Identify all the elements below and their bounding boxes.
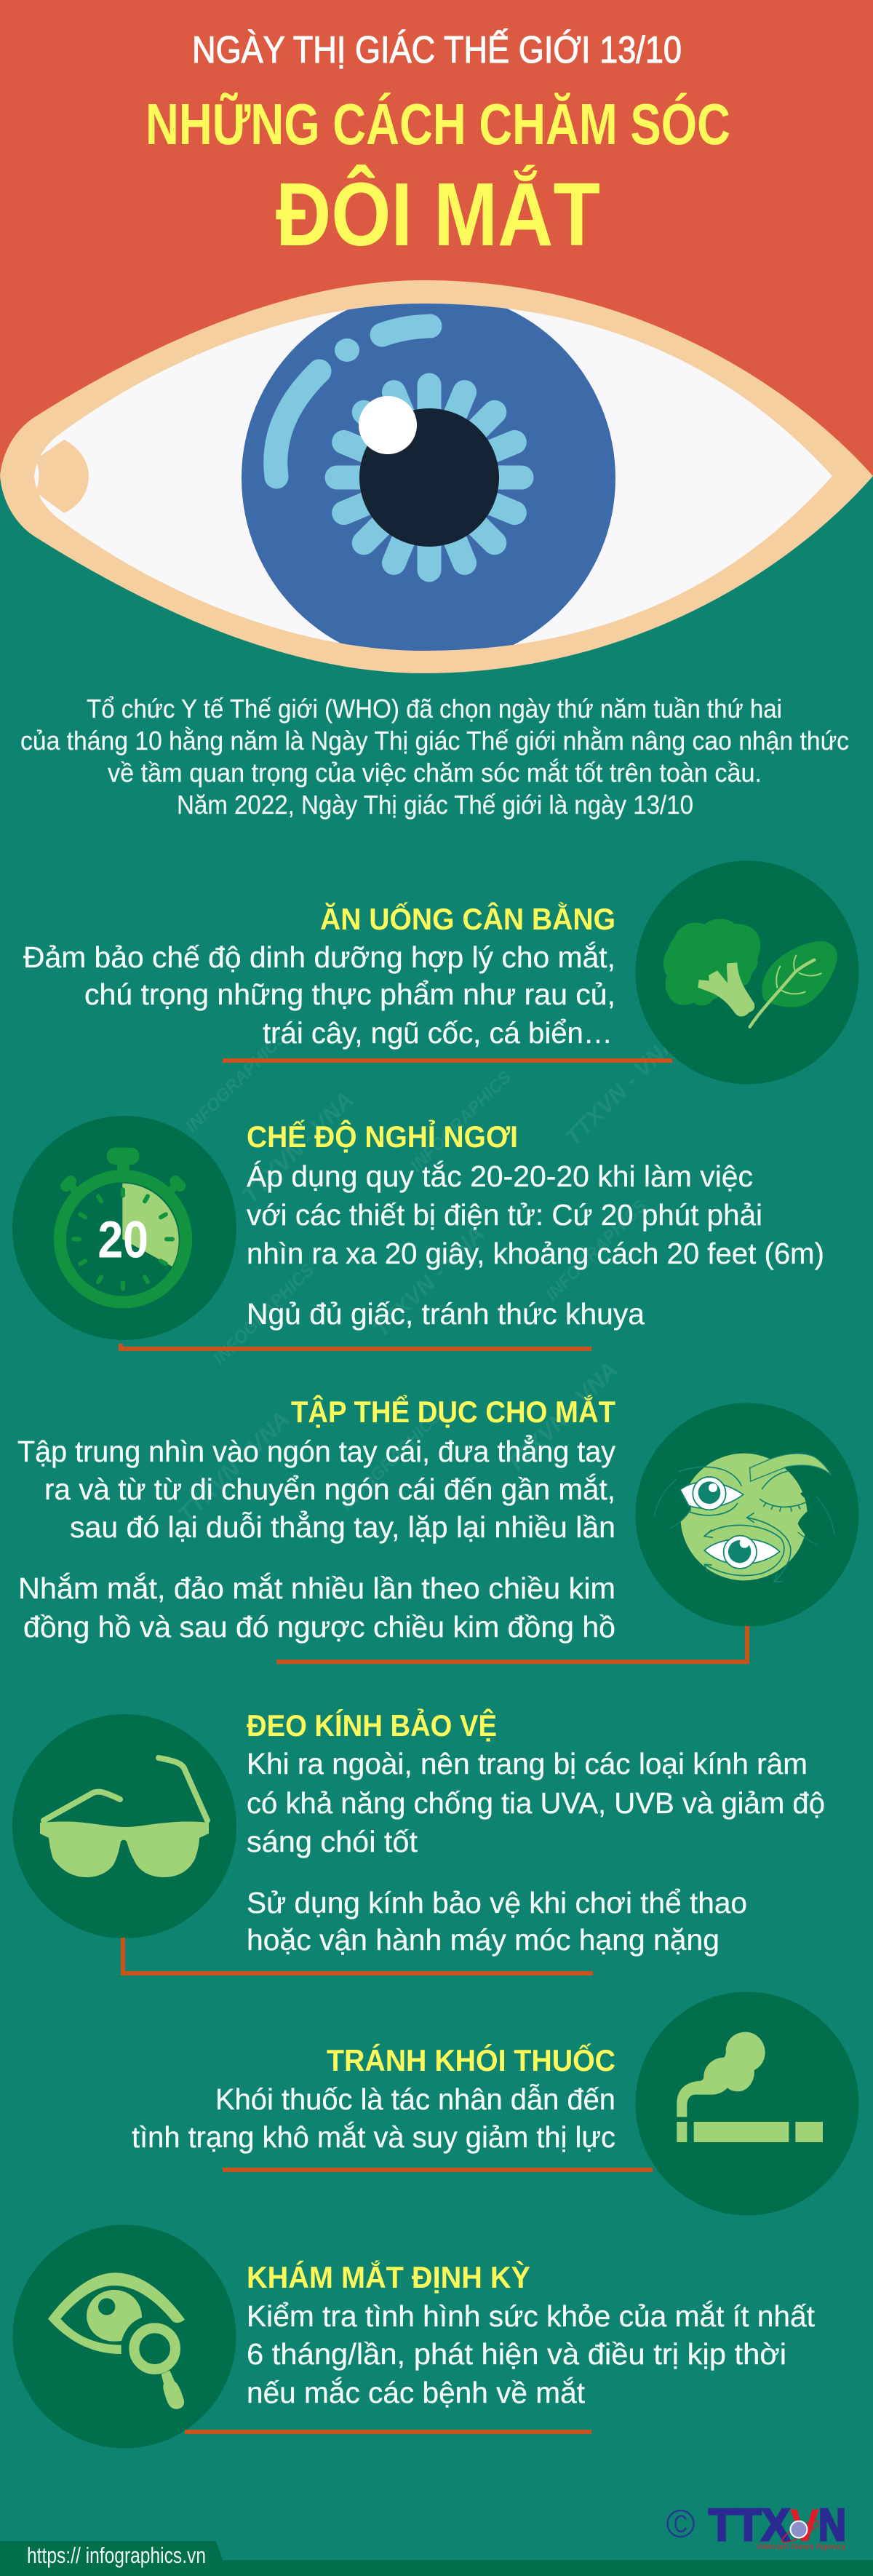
intro text: Năm 2022, Ngày Thị giác Thế giới là ngày 13/10 <box>177 790 693 820</box>
pupil <box>359 408 499 547</box>
panel: protective glasses <box>12 1708 825 1975</box>
icon circle <box>12 1116 236 1340</box>
icon: broccoli and leaf <box>663 919 837 1027</box>
watermarks <box>172 1028 682 1528</box>
icon: stopwatch <box>58 1148 188 1302</box>
footer url: https:// infographics.vn <box>27 2543 206 2568</box>
watermarks: TTXVN - VNA <box>501 1356 623 1478</box>
globe <box>780 2518 821 2545</box>
wordmark: N <box>818 2500 846 2551</box>
copyright mark: C <box>674 2510 687 2538</box>
watermarks: INFOGRAPHICS <box>182 1028 290 1136</box>
body text <box>247 2299 816 2409</box>
connector line <box>119 1344 591 1351</box>
wordmark: V <box>790 2500 819 2551</box>
body text: Tập trung nhìn vào ngón tay cái, đưa thẳng tay <box>17 1435 615 1468</box>
iris dot <box>335 338 359 362</box>
icon circle <box>636 860 858 1085</box>
tagline: Vietnam News Agency <box>756 2543 847 2551</box>
icon circle <box>13 2224 236 2449</box>
panel: eye exercise <box>17 1394 858 1664</box>
icon circle <box>636 1403 858 1626</box>
connector line <box>185 2430 591 2434</box>
eye white <box>34 304 832 651</box>
body text <box>247 1160 824 1331</box>
heading: TRÁNH KHÓI THUỐC <box>327 2042 615 2077</box>
body text: Nhắm mắt, đảo mắt nhiều lần theo chiều kim <box>18 1572 615 1605</box>
background: red header <box>0 0 873 476</box>
watermarks: INFOGRAPHICS <box>337 1406 445 1515</box>
watermarks: TTXVN - VNA <box>236 1086 359 1208</box>
body text: với các thiết bị điện tử: Cứ 20 phút phải <box>247 1198 762 1232</box>
highlight <box>359 396 417 454</box>
body text: chú trọng những thực phẩm như rau củ, <box>84 978 615 1011</box>
body text: Ngủ đủ giấc, tránh thức khuya <box>247 1297 645 1331</box>
iris <box>242 291 615 665</box>
panel: rest <box>12 1116 824 1351</box>
watermarks: INFOGRAPHICS <box>542 1196 650 1304</box>
watermarks: INFOGRAPHICS <box>210 1260 318 1368</box>
watermarks: INFOGRAPHICS <box>407 1067 515 1176</box>
eye outline <box>0 280 873 673</box>
wordmark: TTX <box>709 2500 790 2551</box>
iris rays <box>337 385 522 570</box>
icon: sunglasses <box>40 1758 209 1877</box>
connector line <box>223 1058 672 1063</box>
eye corner <box>36 440 89 513</box>
body text: hoặc vận hành máy móc hạng nặng <box>247 1923 719 1957</box>
panel: balanced diet <box>23 860 858 1085</box>
panel: regular check-up <box>13 2224 816 2449</box>
panel: avoid smoke <box>132 1992 858 2216</box>
heading: ĂN UỐNG CÂN BẰNG <box>320 901 615 936</box>
body text: có khả năng chống tia UVA, UVB và giảm độ <box>247 1786 825 1820</box>
icon: stopwatch: 20 <box>97 1210 148 1269</box>
title: big line: ĐÔI MẮT <box>276 165 600 265</box>
body text: Đảm bảo chế độ dinh dưỡng hợp lý cho mắt, <box>23 940 615 974</box>
iris streaks <box>276 326 430 477</box>
watermarks: TTXVN - VNA <box>367 1220 490 1342</box>
illustration: large eye <box>0 280 873 673</box>
connector line <box>276 1626 749 1664</box>
body text <box>17 1435 615 1644</box>
heading: TẬP THỂ DỤC CHO MẮT <box>291 1394 615 1429</box>
title: main line: NHỮNG CÁCH CHĂM SÓC <box>146 92 730 156</box>
intro text <box>20 694 849 820</box>
heading: CHẾ ĐỘ NGHỈ NGƠI <box>247 1119 518 1154</box>
body text <box>132 2082 615 2154</box>
logo: TTXVN <box>668 2500 847 2551</box>
connector line <box>223 2168 653 2172</box>
heading: KHÁM MẮT ĐỊNH KỲ <box>247 2259 530 2294</box>
icon circle <box>12 1714 236 1938</box>
body text: Kiểm tra tình hình sức khỏe của mắt ít nhất <box>247 2299 816 2333</box>
body text: Khi ra ngoài, nên trang bị các loại kính râm <box>247 1747 808 1780</box>
body text: đồng hồ và sau đó ngược chiều kim đồng hồ <box>23 1610 615 1644</box>
intro text: về tầm quan trọng của việc chăm sóc mắt tốt trên toàn cầu. <box>108 758 762 788</box>
watermarks: TTXVN - VNA <box>559 1029 682 1151</box>
title: event line: NGÀY THỊ GIÁC THẾ GIỚI 13/10 <box>192 28 682 71</box>
icon: eye and magnifier <box>48 2272 185 2409</box>
footer band <box>0 2541 873 2576</box>
body text: Sử dụng kính bảo vệ khi chơi thể thao <box>247 1886 747 1919</box>
connector line <box>121 1938 593 1975</box>
copyright mark <box>668 2510 694 2538</box>
body text: nếu mắc các bệnh về mắt <box>247 2376 586 2409</box>
icon: eyes and hands <box>653 1454 834 1582</box>
wordmark <box>709 2500 846 2551</box>
icon: cigarette <box>677 2032 823 2142</box>
body text: Khói thuốc là tác nhân dẫn đến <box>215 2082 615 2116</box>
intro text: Tổ chức Y tế Thế giới (WHO) đã chọn ngày thứ năm tuần thứ hai <box>87 694 782 724</box>
body text: ra và từ từ di chuyển ngón cái đến gần mắt, <box>44 1473 615 1506</box>
body text <box>247 1747 825 1957</box>
heading: ĐEO KÍNH BẢO VỆ <box>247 1708 497 1743</box>
body text: trái cây, ngũ cốc, cá biển… <box>263 1016 613 1050</box>
body text: 6 tháng/lần, phát hiện và điều trị kịp thời <box>247 2337 786 2371</box>
body text: tình trạng khô mắt và suy giảm thị lực <box>132 2120 615 2154</box>
title block <box>146 28 730 265</box>
body text: sáng chói tốt <box>247 1825 418 1858</box>
body text: nhìn ra xa 20 giây, khoảng cách 20 feet (6m) <box>247 1237 824 1270</box>
icon circle <box>636 1992 858 2216</box>
body text: Áp dụng quy tắc 20-20-20 khi làm việc <box>247 1160 753 1193</box>
watermarks: TTXVN - VNA <box>172 1406 295 1528</box>
body text: sau đó lại duỗi thẳng tay, lặp lại nhiều lần <box>70 1510 615 1544</box>
body text <box>23 940 615 1050</box>
